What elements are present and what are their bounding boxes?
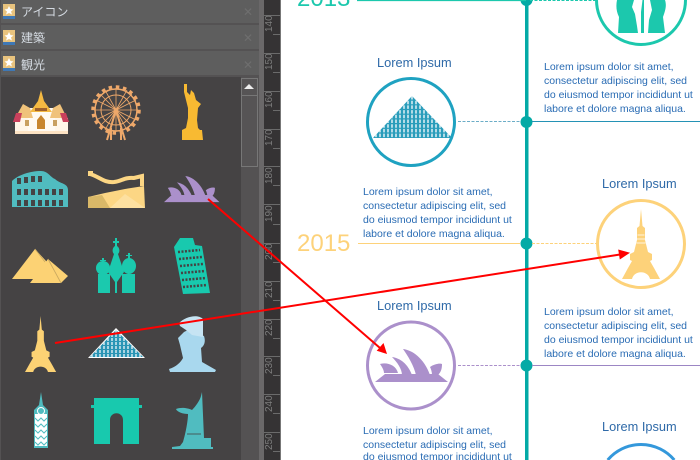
tab: architecture: 建築 xyxy=(21,30,45,45)
tab: icons: アイコン xyxy=(21,5,68,19)
ruler: 150 xyxy=(264,53,275,70)
icon: ferris wheel xyxy=(93,87,139,140)
tab: icons: ✕ xyxy=(243,5,253,19)
arrow: opera house to timeline xyxy=(208,199,387,354)
ruler: 190 xyxy=(264,205,275,222)
ruler: 250 xyxy=(264,433,275,450)
timeline axis xyxy=(520,0,532,460)
tab: icons xyxy=(1,0,259,23)
tab: architecture: ✕ xyxy=(243,31,253,45)
year: 2015: 2015 xyxy=(297,230,350,257)
event: cathedral, top right: Lorem ipsum dolor sit amet, xyxy=(544,61,674,73)
event: eiffel tower, right: Lorem ipsum dolor sit amet, xyxy=(544,306,674,318)
event: louvre, left: consectetur adipiscing elit, sed xyxy=(363,200,506,212)
ruler: 170 xyxy=(264,129,275,146)
tab: sightseeing xyxy=(1,51,259,75)
event: eiffel tower, right xyxy=(544,176,693,360)
icon: temple xyxy=(13,90,69,134)
event: opera house, left: Lorem ipsum dolor sit amet, xyxy=(363,425,493,437)
icon: louvre pyramid xyxy=(88,328,145,358)
ruler: 180 xyxy=(264,167,275,184)
icon: statue of liberty xyxy=(182,84,203,140)
event: bottom right xyxy=(602,419,677,460)
event: eiffel tower, right: Lorem Ipsum xyxy=(602,176,677,191)
icon: saint basil's cathedral xyxy=(96,238,136,293)
ruler: 160 xyxy=(264,91,275,108)
event: eiffel tower, right: consectetur adipiscing elit, sed xyxy=(544,320,687,332)
event: opera house, left xyxy=(363,298,700,460)
icon: leaning tower of pisa xyxy=(174,238,210,294)
icon: eiffel tower xyxy=(25,316,56,372)
tab: sightseeing: ✕ xyxy=(243,58,253,72)
event: cathedral, top right: labore et dolore magna aliqua. xyxy=(544,103,686,115)
event: eiffel tower, right: do eiusmod tempor incididunt ut xyxy=(544,334,693,346)
tab: architecture xyxy=(1,25,259,49)
event: cathedral, top right: do eiusmod tempor incididunt ut xyxy=(544,89,693,101)
event: louvre, left: do eiusmod tempor incididunt ut xyxy=(363,214,512,226)
icon: burj al arab xyxy=(172,392,213,449)
icon: big ben xyxy=(34,392,48,448)
ruler: 200 xyxy=(264,243,275,260)
ruler: 210 xyxy=(264,281,275,298)
event: opera house, left: Lorem Ipsum xyxy=(377,298,452,313)
arrow: eiffel tower to timeline xyxy=(55,250,630,343)
icon: colosseum xyxy=(12,171,68,207)
ruler: 220 xyxy=(264,319,275,336)
event: louvre, left: Lorem ipsum dolor sit amet, xyxy=(363,186,493,198)
event: cathedral, top right: consectetur adipiscing elit, sed xyxy=(544,75,687,87)
ruler: 140 xyxy=(264,15,275,32)
tab: sightseeing: 観光 xyxy=(21,58,45,72)
event: opera house, left: consectetur adipiscing elit, sed xyxy=(363,439,506,451)
event: louvre, left: Lorem Ipsum xyxy=(377,55,452,70)
ruler xyxy=(259,0,281,460)
icon: merlion xyxy=(169,316,216,372)
event: louvre, left: labore et dolore magna aliqua. xyxy=(363,228,505,240)
event: eiffel tower, right: labore et dolore magna aliqua. xyxy=(544,348,686,360)
event: louvre, left xyxy=(363,55,700,240)
icon: great wall xyxy=(88,171,145,208)
icon: sydney opera house xyxy=(164,176,219,202)
icon: pyramids xyxy=(12,249,68,283)
event: bottom right: Lorem Ipsum xyxy=(602,419,677,434)
panel: icon library xyxy=(0,0,264,460)
scrollbar xyxy=(241,78,258,166)
event: cathedral, top right xyxy=(544,0,693,115)
ruler: 240 xyxy=(264,395,275,412)
icon: arc de triomphe xyxy=(91,398,142,444)
ruler: 230 xyxy=(264,357,275,374)
